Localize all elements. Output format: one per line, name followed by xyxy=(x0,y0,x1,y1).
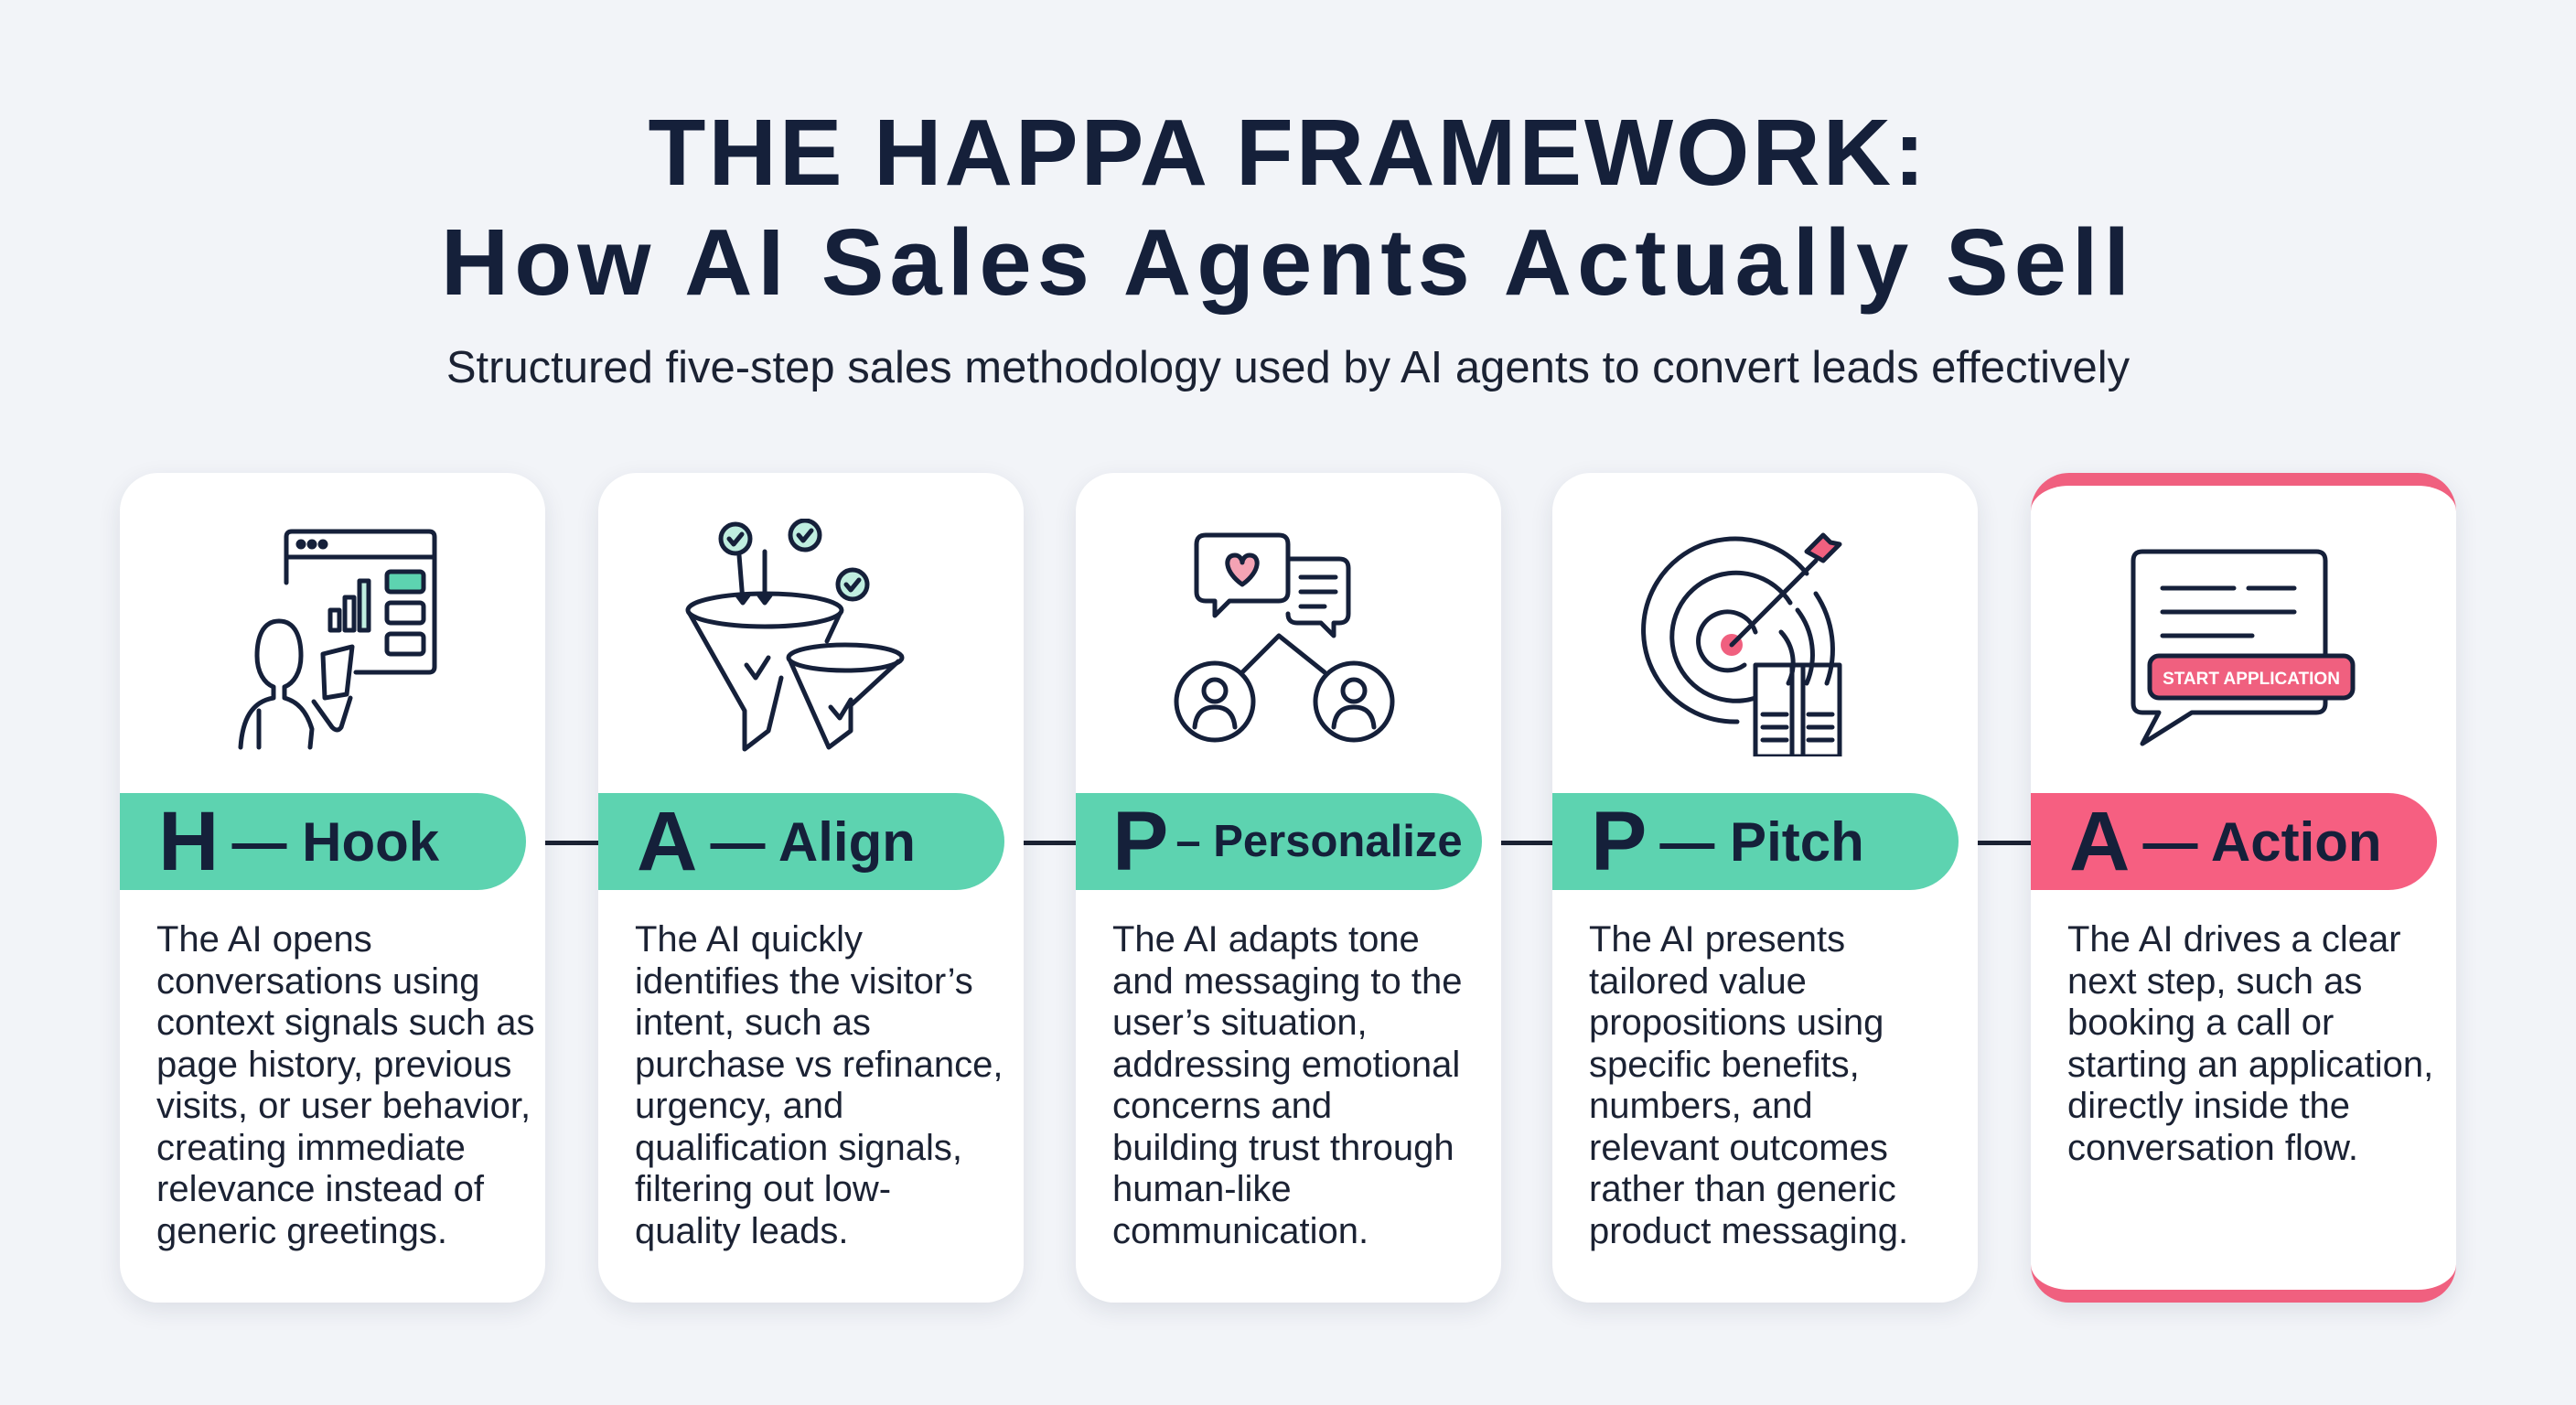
icon: funnels xyxy=(686,519,904,752)
text: align: purchase vs refinance, xyxy=(635,1045,1003,1085)
text: hook: context signals such as xyxy=(156,1003,535,1043)
text: pitch: numbers, and xyxy=(1589,1086,1813,1126)
text: hook: The AI opens xyxy=(156,919,372,960)
text: align: filtering out low- xyxy=(635,1169,891,1209)
label: H Hook: — Hook xyxy=(231,810,439,873)
text: action: conversation flow. xyxy=(2067,1127,2358,1167)
icon: chat with start application button xyxy=(2131,549,2355,746)
panel: action xyxy=(2031,473,2456,1303)
text: action: booking a call or xyxy=(2067,1003,2334,1043)
text: personalize: concerns and xyxy=(1112,1086,1332,1126)
label: H Hook xyxy=(120,793,526,890)
label: A Action: A xyxy=(2069,794,2130,887)
label: A Action xyxy=(2031,793,2437,890)
text: hook: conversations using xyxy=(156,960,480,1001)
label: H Hook: H xyxy=(158,794,219,887)
text: hook: page history, previous xyxy=(156,1045,511,1085)
panel: hook xyxy=(120,473,545,1303)
text: hook: visits, or user behavior, xyxy=(156,1086,531,1126)
text: align xyxy=(635,919,1003,1251)
text: action: The AI drives a clear xyxy=(2067,919,2401,960)
label: A Align: — Align xyxy=(710,810,916,873)
text: pitch: propositions using xyxy=(1589,1003,1884,1043)
panel: personalize xyxy=(1076,473,1501,1303)
icon: target with arrow and cash xyxy=(1641,532,1842,756)
icon: person at dashboard xyxy=(238,529,437,750)
text: personalize: human-like xyxy=(1112,1169,1292,1209)
panel: align xyxy=(598,473,1024,1303)
text: personalize: building trust through xyxy=(1112,1127,1454,1167)
text: pitch: relevant outcomes xyxy=(1589,1127,1888,1167)
text: pitch: The AI presents xyxy=(1589,919,1845,960)
text: align: The AI quickly xyxy=(635,919,863,960)
label: A Align: A xyxy=(637,794,697,887)
text: hook xyxy=(156,919,535,1251)
title line 2: How AI Sales Agents Actually Sell xyxy=(441,209,2135,315)
label: P Personalize: – Personalize xyxy=(1175,817,1463,866)
subtitle: Structured five-step sales methodology used by AI agents to convert leads effectively xyxy=(446,343,2130,392)
label: P Pitch xyxy=(1552,793,1959,890)
text: personalize: communication. xyxy=(1112,1211,1368,1251)
icon: chat people xyxy=(1175,532,1394,743)
text: personalize: user’s situation, xyxy=(1112,1003,1368,1043)
text: align: urgency, and xyxy=(635,1086,843,1126)
text: personalize: The AI adapts tone xyxy=(1112,919,1420,960)
text: pitch xyxy=(1589,919,1908,1251)
title: THE HAPPA FRAMEWORK: xyxy=(649,100,1927,205)
text: pitch: specific benefits, xyxy=(1589,1045,1860,1085)
label: P Personalize xyxy=(1076,793,1482,890)
text: pitch: product messaging. xyxy=(1589,1211,1908,1251)
text: personalize: and messaging to the xyxy=(1112,960,1462,1001)
label: P Personalize: P xyxy=(1112,794,1168,887)
text: align: quality leads. xyxy=(635,1211,848,1251)
text: pitch: tailored value xyxy=(1589,960,1807,1001)
label: A Action: — Action xyxy=(2142,810,2382,873)
text: action xyxy=(2067,919,2433,1167)
label: A Align xyxy=(598,793,1004,890)
text: hook: relevance instead of xyxy=(156,1169,484,1209)
text: action: next step, such as xyxy=(2067,960,2362,1001)
connector lines xyxy=(526,841,599,845)
label: P Pitch: — Pitch xyxy=(1659,810,1864,873)
text: action: starting an application, xyxy=(2067,1045,2433,1085)
text: hook: creating immediate xyxy=(156,1127,466,1167)
panel: pitch xyxy=(1552,473,1978,1303)
text: pitch: rather than generic xyxy=(1589,1169,1896,1209)
text: personalize xyxy=(1112,919,1462,1251)
text: align: identifies the visitor’s xyxy=(635,960,973,1001)
text: personalize: addressing emotional xyxy=(1112,1045,1460,1085)
label: P Pitch: P xyxy=(1591,794,1647,887)
text: hook: generic greetings. xyxy=(156,1211,447,1251)
icon: chat with start application button: START APPLICATION xyxy=(2163,670,2340,689)
text: action: directly inside the xyxy=(2067,1086,2350,1126)
text: align: qualification signals, xyxy=(635,1127,962,1167)
text: align: intent, such as xyxy=(635,1003,871,1043)
